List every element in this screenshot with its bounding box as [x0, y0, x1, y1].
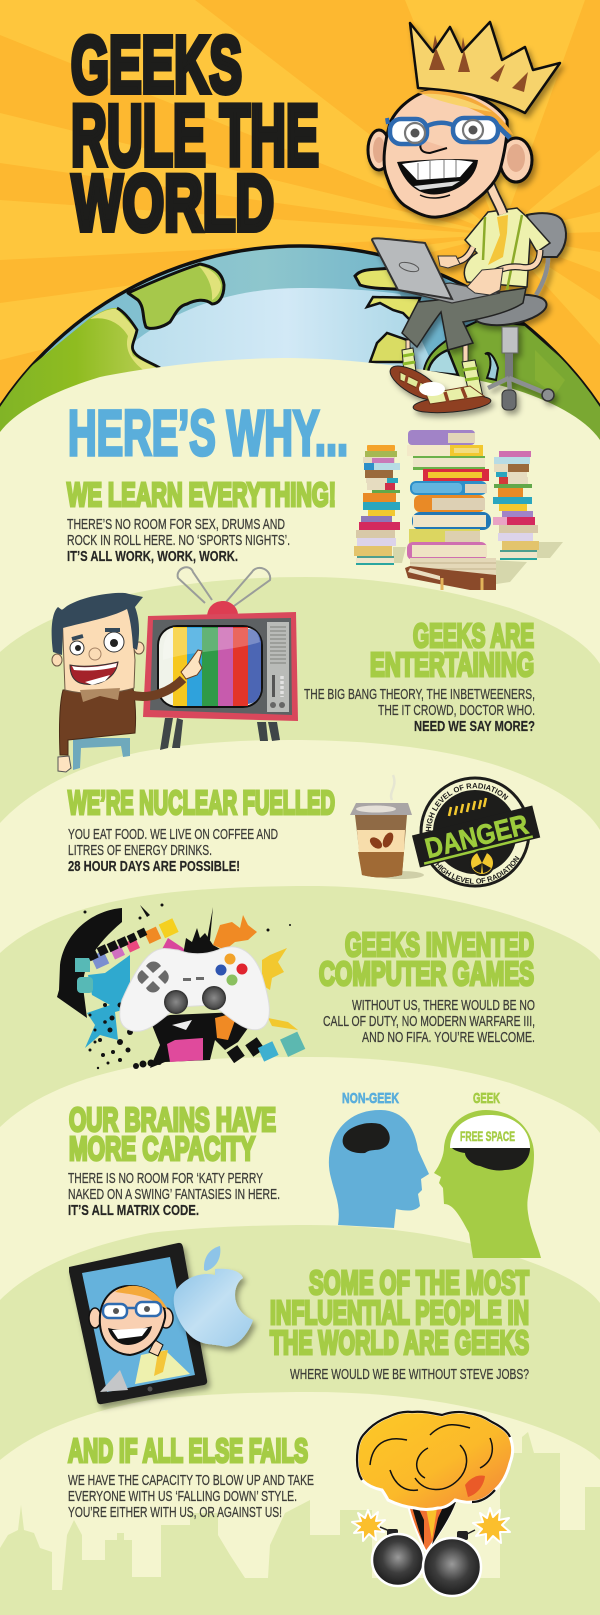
icon: left bomb [372, 1529, 424, 1586]
heading: WE’RE NUCLEAR FUELLED [68, 784, 335, 821]
text block: THE IT CROWD, DOCTOR WHO. [378, 703, 535, 719]
text block: WITHOUT US, THERE WOULD BE NO [352, 998, 535, 1014]
title [71, 20, 319, 247]
icon: left book stack [354, 445, 400, 565]
background: sunburst [0, 0, 600, 620]
globe [0, 244, 600, 440]
text block: IT’S ALL MATRIX CODE. [68, 1203, 199, 1219]
icon: coffee cup [350, 775, 424, 879]
icon: sparks [352, 1508, 510, 1544]
panel: influential people [69, 1243, 529, 1404]
icon: geek head [434, 1110, 541, 1258]
text block [323, 998, 535, 1046]
heading: MORE CAPACITY [69, 1130, 255, 1167]
text block [68, 827, 278, 875]
background bands [0, 358, 600, 1615]
text block: ROCK IN ROLL HERE. NO ‘SPORTS NIGHTS’. [67, 533, 290, 549]
text block [67, 517, 290, 565]
heading: OUR BRAINS HAVE [69, 1101, 276, 1138]
text block: YOU’RE EITHER WITH US, OR AGAINST US! [68, 1505, 282, 1521]
label: free space: FREE SPACE [460, 1129, 515, 1144]
panel: geeks invented computer games [57, 904, 535, 1069]
label: stamp bottom: HIGH LEVEL OF RADIATION [435, 856, 520, 884]
text block [68, 1473, 314, 1521]
icon: tablet with geek [69, 1243, 207, 1404]
label: stamp top: HIGH LEVEL OF RADIATION [426, 783, 508, 832]
icon: television [143, 567, 298, 750]
icon: head [368, 89, 532, 217]
text block: THERE’S NO ROOM FOR SEX, DRUMS AND [67, 517, 285, 533]
panel: geeks are entertaining [52, 567, 535, 772]
icon: paint splash [75, 905, 298, 1068]
title: RULE THE [71, 88, 319, 184]
icon: arms and hands [438, 247, 540, 295]
text block [68, 1171, 280, 1219]
icon: d-pad and sticks [138, 962, 204, 992]
icon: chair [471, 213, 566, 410]
panel: here's why heading: HERE’S WHY... [68, 397, 348, 469]
panel: we learn everything [67, 430, 563, 590]
icon: apple logo [174, 1246, 253, 1347]
text block [304, 687, 535, 735]
panel: and if all else fails [68, 1412, 513, 1596]
label: non-geek: NON-GEEK [342, 1090, 399, 1107]
heading [319, 926, 534, 992]
icon: curved arrow [57, 908, 122, 1018]
icon: stacks of books [354, 430, 563, 590]
icon: right bomb [423, 1531, 481, 1596]
heading [370, 617, 534, 683]
panel: nuclear fuelled [66, 774, 540, 888]
icon: game controller with splash [57, 904, 305, 1069]
title: WORLD [72, 158, 274, 247]
icon: danger stamp: DANGER [422, 809, 531, 864]
illustration: geek king on laptop [368, 22, 566, 415]
icon: non-geek head [329, 1110, 429, 1228]
icon: socks and sandals [385, 340, 492, 415]
icon: neck [490, 185, 503, 214]
icon: right book stack [493, 451, 539, 560]
label: geek: GEEK [473, 1090, 500, 1107]
icon: crown [410, 22, 560, 113]
skyline [0, 1432, 600, 1615]
text block: YOU EAT FOOD. WE LIVE ON COFFEE AND [68, 827, 278, 843]
heading [270, 1264, 529, 1361]
icon: trousers [402, 288, 526, 350]
text block: WE HAVE THE CAPACITY TO BLOW UP AND TAKE [68, 1473, 314, 1489]
text block: NEED WE SAY MORE? [414, 719, 535, 735]
icon: centre book stack [405, 430, 496, 590]
icon: screen colour bars [159, 627, 261, 706]
heading: WE LEARN EVERYTHING! [67, 476, 336, 513]
text block: NAKED ON A SWING’ FANTASIES IN HERE. [68, 1187, 280, 1203]
icon: squares and dots [84, 904, 291, 1069]
icon: presenter man [52, 593, 202, 772]
icon: shirt and tie [464, 208, 550, 290]
panel: brains [68, 1090, 541, 1258]
icon: danger stamp [412, 776, 540, 888]
heading [69, 1101, 276, 1167]
text block: 28 HOUR DAYS ARE POSSIBLE! [68, 859, 240, 875]
text block: LITRES OF ENERGY DRINKS. [68, 843, 212, 859]
text block: IT’S ALL WORK, WORK, WORK. [67, 549, 238, 565]
icon: laptop [372, 238, 500, 303]
title: GEEKS [71, 20, 242, 109]
text block: EVERYONE WITH US ‘FALLING DOWN’ STYLE. [68, 1489, 297, 1505]
text block: AND NO FIFA. YOU’RE WELCOME. [362, 1030, 535, 1046]
heading: AND IF ALL ELSE FAILS [68, 1432, 308, 1469]
icon: mushroom cloud and bombs [352, 1412, 513, 1596]
text block: THERE IS NO ROOM FOR ‘KATY PERRY [68, 1171, 263, 1187]
